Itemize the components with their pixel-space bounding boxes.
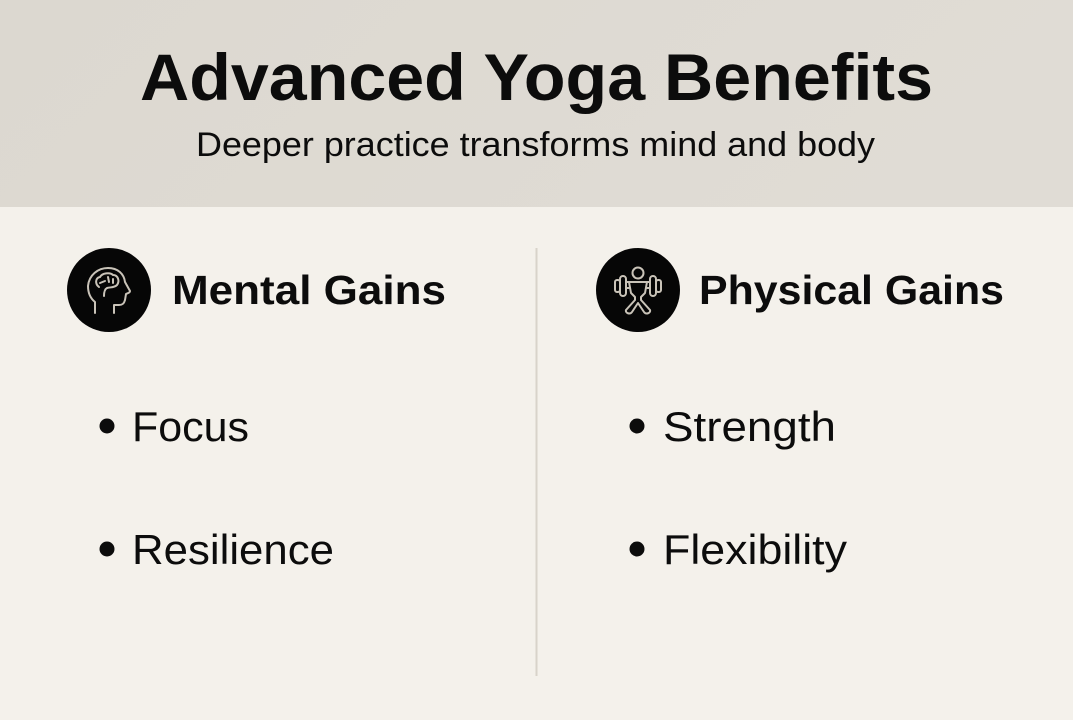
header band xyxy=(0,0,1073,207)
subtitle: Deeper practice transforms mind and body xyxy=(196,126,875,164)
title: Advanced Yoga Benefits xyxy=(140,40,933,114)
heading: physical gains: Physical Gains xyxy=(699,267,1004,313)
bullet: resilience: Resilience xyxy=(132,526,334,573)
icon: weightlifter xyxy=(596,248,680,332)
panel: mental gains xyxy=(67,248,446,573)
bullet: focus: Focus xyxy=(132,403,249,450)
panel: physical gains xyxy=(596,248,1004,573)
icon: head with brain xyxy=(67,248,151,332)
bullet: strength: Strength xyxy=(663,403,836,450)
heading: mental gains: Mental Gains xyxy=(172,267,446,313)
bullet: flexibility: Flexibility xyxy=(663,526,847,573)
column divider xyxy=(536,248,538,676)
